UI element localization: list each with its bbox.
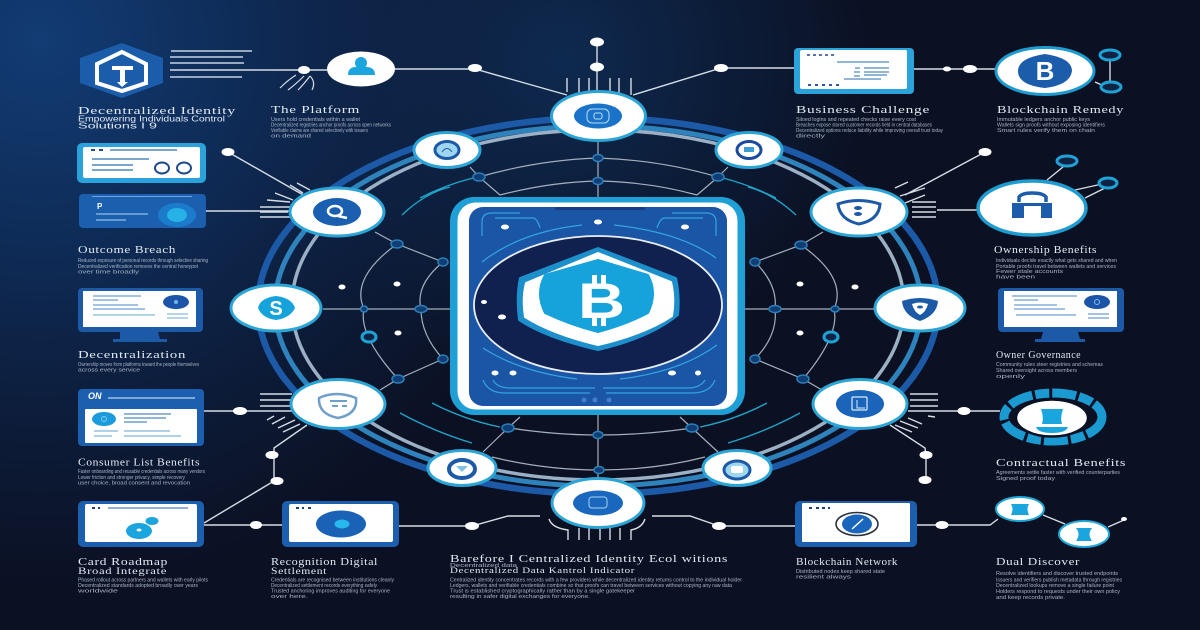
text: recognition: Trusted anchoring improves auditing for everyone — [271, 588, 390, 594]
node: lower left small — [428, 450, 496, 486]
text: owner governance: Community rules steer registries and schemas — [996, 362, 1103, 368]
bitcoin shield — [518, 248, 679, 350]
text: recognition: Credentials are recognised between institutions cleanly — [271, 578, 394, 584]
text: card roadmap — [76, 556, 208, 594]
text: centralized identity summary: resulting in safer digital exchanges for everyone. — [450, 594, 591, 600]
text: blockchain network: resilient always — [796, 574, 851, 580]
text: ownership benefits: Portable proofs travel between wallets and services — [996, 264, 1116, 270]
text: blockchain remedy: Blockchain Remedy — [997, 104, 1124, 116]
node: upper left small — [414, 132, 480, 168]
text: data discover: Dual Discover — [996, 556, 1080, 568]
icon: lock node — [978, 156, 1117, 235]
text: outcome breach — [78, 244, 208, 276]
node: left middle — [231, 285, 321, 331]
text: data discover: Issuers and verifiers publish metadata through registries — [996, 578, 1122, 584]
text: ownership benefits: Ownership Benefits — [994, 244, 1097, 256]
text: contractual benefits: Contractual Benefits — [996, 457, 1126, 469]
text: recognition: Recognition Digital — [271, 556, 378, 568]
node: lower right small — [703, 450, 771, 486]
text: blockchain network: Distributed nodes keep shared state — [796, 569, 885, 575]
text: business challenge: Business Challenge — [796, 104, 930, 116]
text: blockchain remedy: Smart rules verify them on chain — [997, 128, 1095, 134]
panel: top right card — [794, 48, 914, 94]
text: data discover: Decentralized lookups remove a single failure point — [996, 583, 1114, 589]
text: outcome breach: Outcome Breach — [78, 244, 176, 256]
phone frame — [450, 197, 745, 415]
text: business challenge — [796, 104, 943, 140]
panel: profile card — [77, 143, 206, 183]
text: recognition: Settlement — [271, 567, 327, 577]
text: recognition: over here. — [271, 594, 309, 600]
text: blockchain network — [796, 556, 898, 580]
panel: wallet card — [79, 194, 206, 228]
text: owner governance: Shared oversight across members — [996, 368, 1077, 374]
title: Decentralized Identity — [78, 105, 236, 117]
text: ownership benefits: Fewer stale accounts — [996, 269, 1063, 275]
panel: right monitor — [998, 288, 1124, 342]
icon: blockchain node — [996, 48, 1121, 94]
text: card roadmap: Broad Integrate — [78, 567, 167, 577]
connector lines — [170, 38, 1127, 540]
text: data discover: and keep records private. — [996, 595, 1065, 601]
text: decentralization — [78, 349, 199, 374]
node: upper right small — [716, 132, 782, 168]
text: business challenge: Breaches expose stored customer records held in central databases — [796, 122, 932, 128]
text: data discover: Holders respond to requests under their own policy — [996, 589, 1120, 595]
text: card roadmap: Decentralized standards adopted broadly over years — [78, 583, 198, 589]
text: decentralization: Ownership moves from platforms toward the people themselves — [78, 362, 199, 368]
icon: identity hexagon — [80, 43, 163, 98]
text: consumer benefits: Lower friction and stronger privacy, simple recovery — [78, 475, 185, 481]
inner network lines — [323, 142, 874, 478]
icon: blockchain node: B — [1036, 56, 1054, 86]
text: card roadmap: Card Roadmap — [78, 556, 168, 568]
icon: segmented ring — [1004, 393, 1102, 441]
node: left upper — [290, 188, 384, 236]
text: business challenge: Decentralized options reduce liability while improving overall trust today — [796, 128, 943, 134]
text: blockchain network: Blockchain Network — [796, 556, 898, 568]
text: card roadmap: worldwide — [76, 588, 118, 594]
text: owner governance: Owner Governance — [996, 349, 1081, 361]
text: recognition: Decentralized settlement records everything safely — [271, 583, 377, 589]
text: recognition — [271, 556, 394, 600]
text: the platform: Decentralized registries anchor proofs across open networks — [271, 122, 391, 128]
text: the platform: The Platform — [271, 104, 360, 116]
network nodes — [231, 92, 965, 528]
panel: on card — [78, 389, 204, 446]
node: bottom — [552, 478, 644, 528]
top left identity block: Empowering Individuals Control — [78, 114, 225, 124]
icon: linked nodes — [996, 497, 1109, 547]
text: the platform: on demand — [271, 134, 311, 140]
text: blockchain remedy: Wallets sign proofs without exposing identifiers — [997, 122, 1105, 128]
panel: wallet card: P — [97, 202, 103, 211]
orbital rings — [258, 118, 938, 494]
text: consumer benefits: Faster onboarding and reusable credentials across many vendors — [78, 469, 205, 475]
text: consumer benefits: Consumer List Benefits — [78, 456, 200, 468]
node: left middle: S — [269, 298, 283, 320]
node: right lower — [813, 380, 907, 428]
text: card roadmap: Phased rollout across partners and wallets with early pilots — [78, 578, 208, 584]
text: business challenge: Siloed logins and repeated checks raise every cost — [796, 117, 916, 123]
icon: person node — [327, 52, 395, 86]
text: centralized identity summary: Barefore I Centralized Identity Ecol witions — [450, 553, 728, 565]
panel: bottom right card — [795, 501, 917, 547]
text: the platform: Users hold credentials within a wallet — [271, 117, 360, 123]
phone dots — [492, 220, 701, 376]
text: data discover: Resolve identifiers and discover trusted endpoints — [996, 571, 1118, 577]
text: the platform — [271, 104, 391, 140]
text: consumer benefits: user choice, broad consent and revocation — [78, 480, 190, 486]
text: outcome breach: Reduced exposure of personal records through selective sharing — [78, 258, 208, 264]
node: left lower — [291, 380, 385, 428]
decorative label lines — [170, 51, 252, 77]
node: top — [552, 92, 646, 140]
node: right middle — [875, 285, 965, 331]
text: the platform: Verifiable claims are shared selectively with issuers — [271, 128, 368, 134]
text: outcome breach: Decentralized verification removes the central honeypot — [78, 264, 198, 270]
bitcoin symbol: B — [578, 273, 625, 329]
top left identity block — [78, 43, 252, 130]
text: centralized identity summary: Trust is established cryptographically rather than by a single gatekeeper — [450, 588, 635, 594]
text: owner governance — [996, 349, 1103, 380]
text: outcome breach: over time broadly — [78, 270, 139, 276]
text: ownership benefits: have been — [996, 274, 1035, 280]
panel: on card: ON — [88, 391, 102, 401]
phone circuit lines — [482, 213, 717, 393]
text: centralized identity summary: Ledgers, wallets and verifiable credentials combine so that proofs can travel between services without copying any raw data — [450, 583, 733, 589]
text: ownership benefits — [994, 244, 1117, 280]
text: contractual benefits — [996, 457, 1126, 482]
node: right upper — [811, 188, 907, 236]
text: owner governance: openly — [996, 374, 1025, 380]
text: decentralization: Decentralization — [78, 349, 186, 361]
text: blockchain remedy: Immutable ledgers anchor public keys — [997, 117, 1090, 123]
text: centralized identity summary — [450, 553, 742, 600]
identity ellipse — [474, 236, 722, 374]
panel: left monitor — [78, 288, 203, 342]
text: business challenge: directly — [796, 134, 825, 140]
text: centralized identity summary: Centralized identity concentrates records with a few providers while decentralized identity returns control to the individual holder — [450, 578, 742, 584]
central phone — [450, 197, 745, 415]
text: decentralization: across every service — [78, 368, 140, 374]
top left identity block: Solutions I 9 — [78, 122, 158, 130]
text: consumer benefits — [78, 456, 205, 486]
text: blockchain remedy — [997, 104, 1124, 134]
panel: bottom card middle — [282, 501, 399, 547]
text: centralized identity summary: Decentralized data — [450, 563, 518, 569]
text: ownership benefits: Individuals decide exactly what gets shared and when — [996, 258, 1117, 264]
text: data discover — [996, 556, 1122, 601]
text: contractual benefits: Agreements settle faster with verified counterparties — [996, 470, 1120, 476]
text: contractual benefits: Signed proof today — [996, 476, 1055, 482]
panel: bottom card left — [78, 501, 204, 547]
text: centralized identity summary: Decentralized Data Kantrol Indicator — [450, 565, 635, 575]
